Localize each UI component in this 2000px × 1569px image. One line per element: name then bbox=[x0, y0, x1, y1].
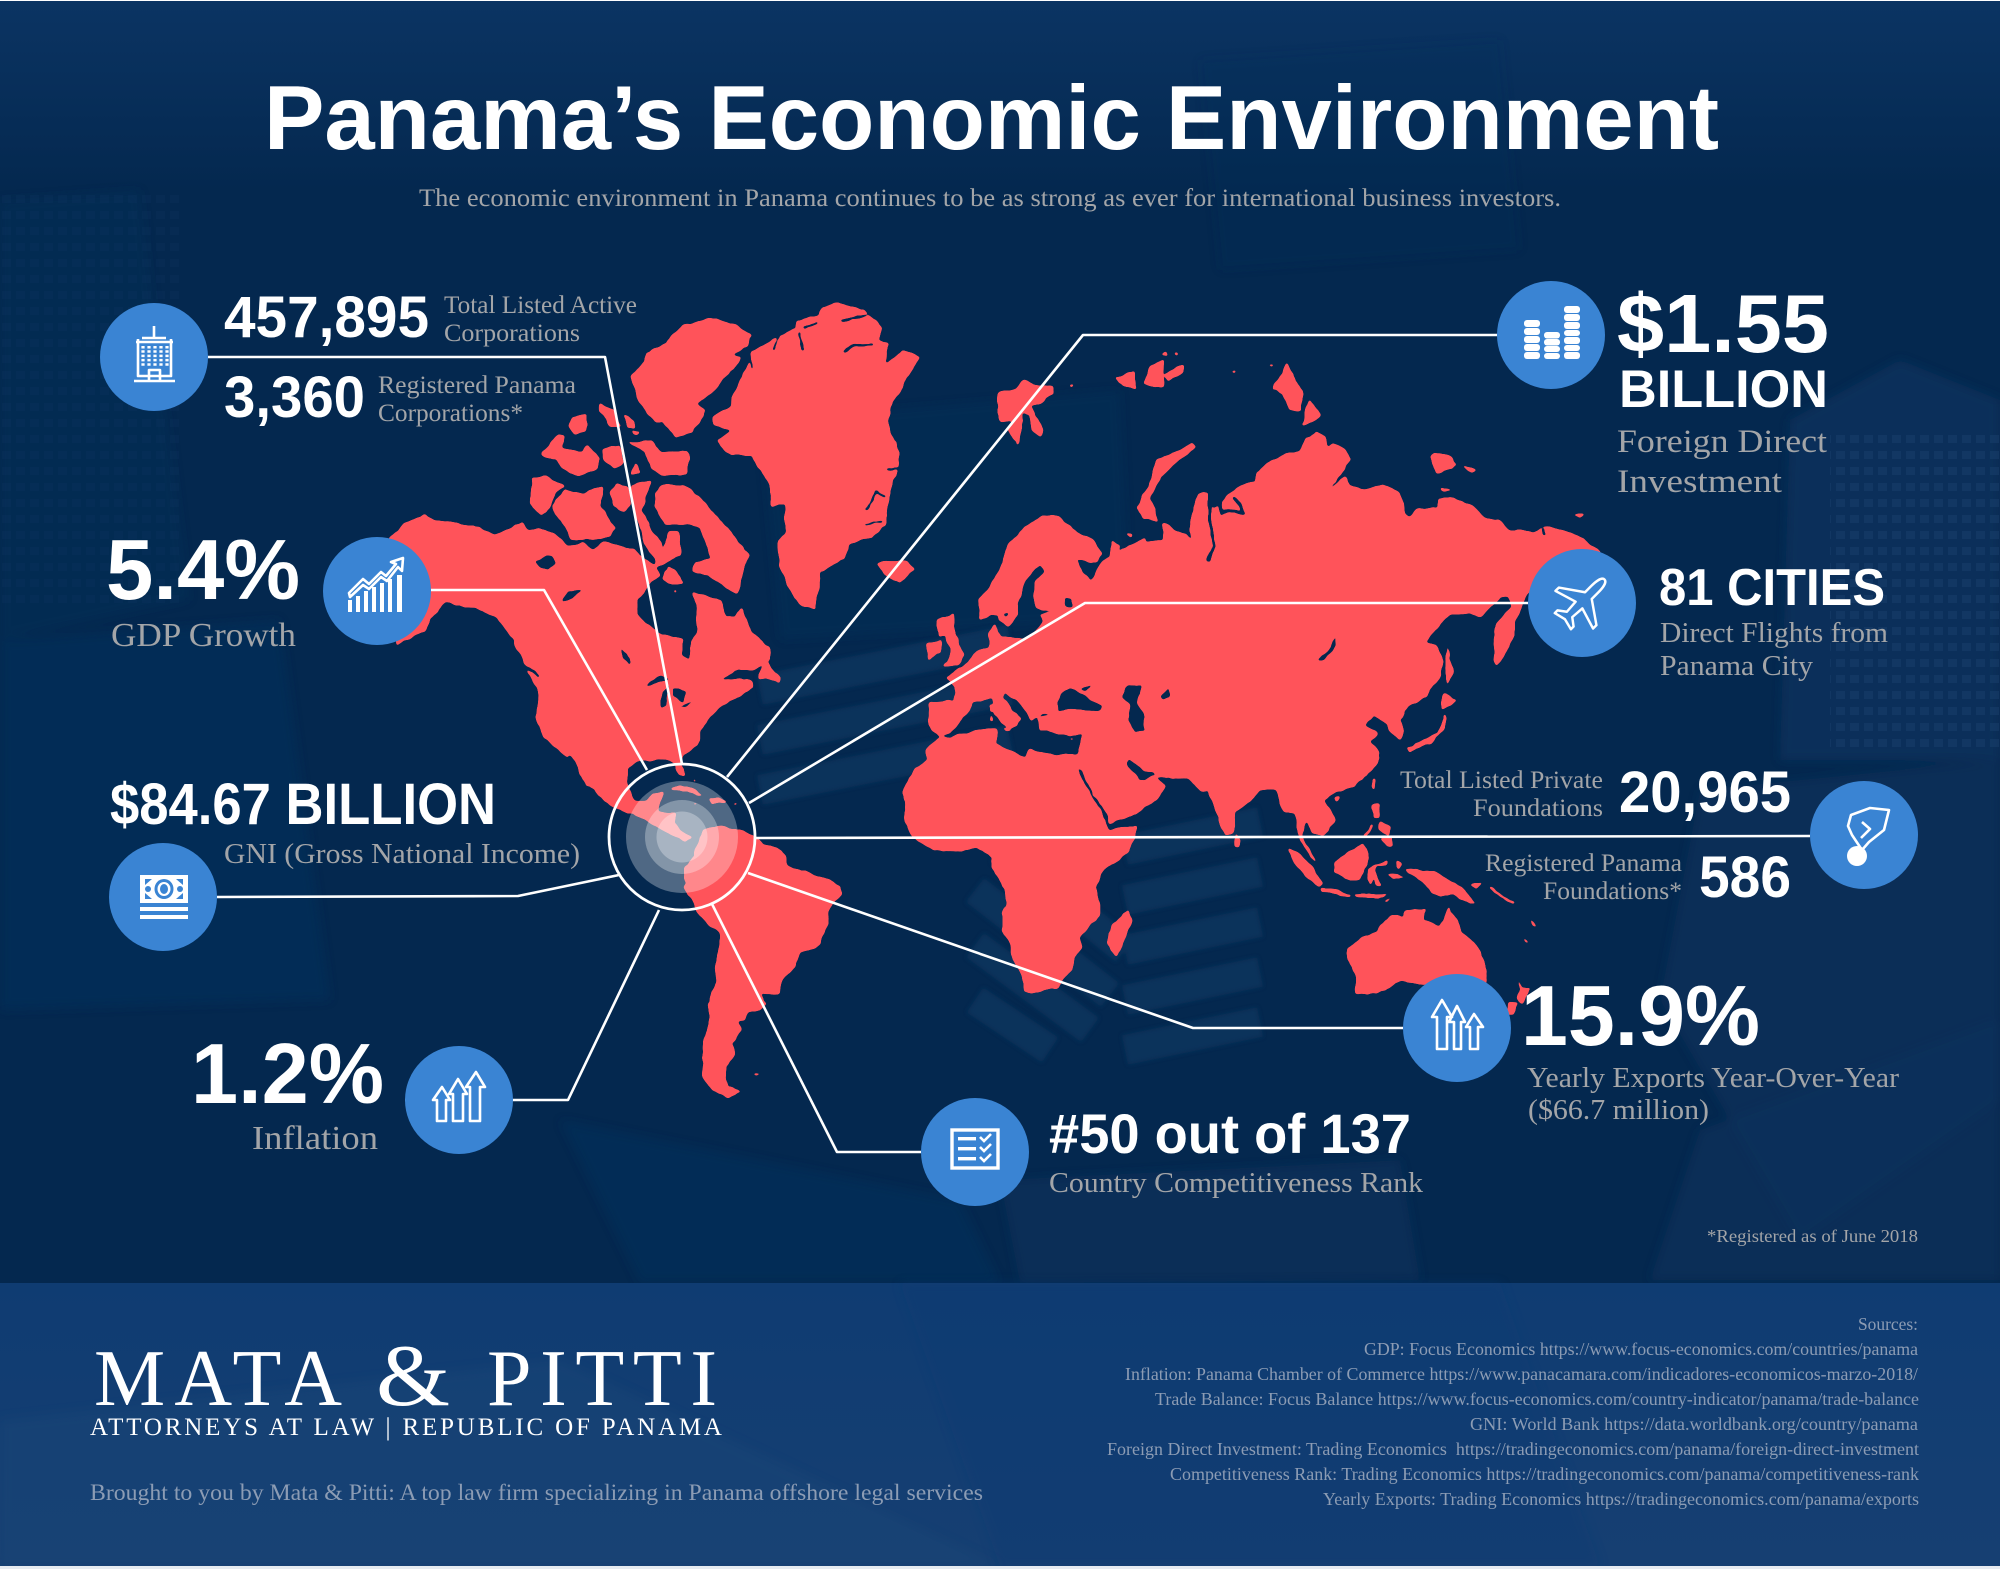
stat: private foundations: Foundations bbox=[1473, 795, 1603, 822]
stat: gross national income: $84.67 BILLION bbox=[110, 772, 496, 837]
stat: direct flights: Direct Flights from bbox=[1660, 617, 1888, 649]
stat: private foundations: Total Listed Private bbox=[1400, 767, 1603, 794]
stat: private foundations: 586 bbox=[1699, 845, 1791, 910]
sources list: Yearly Exports: Trading Economics https://tradingeconomics.com/panama/exports bbox=[1323, 1489, 1919, 1509]
sources list: GNI: World Bank https://data.worldbank.org/country/panama bbox=[1470, 1414, 1918, 1434]
stat: inflation bbox=[191, 1027, 513, 1157]
sources list: Sources: bbox=[1858, 1314, 1918, 1334]
stat: gross national income bbox=[109, 772, 580, 951]
stat: foreign direct investment: Investment bbox=[1617, 464, 1782, 500]
stat: gross national income: GNI (Gross National Income) bbox=[224, 839, 580, 870]
stat: foreign direct investment: $1.55 bbox=[1617, 277, 1829, 370]
stat: direct flights: 81 CITIES bbox=[1659, 559, 1885, 617]
stat: yearly exports: ($66.7 million) bbox=[1528, 1095, 1709, 1126]
sources list: Trade Balance: Focus Balance https://www.focus-economics.com/country-indicator/panama/trade-balance bbox=[1155, 1389, 1919, 1409]
map: North America and Arctic Canada bbox=[387, 318, 779, 813]
map: Arctic and European islands bbox=[927, 352, 1197, 667]
stat: foreign direct investment: Foreign Direct bbox=[1617, 424, 1827, 460]
stat: foreign direct investment: BILLION bbox=[1619, 360, 1828, 419]
map: South America bbox=[683, 826, 842, 1098]
stat: private foundations: Registered Panama bbox=[1485, 850, 1682, 877]
footer band bbox=[0, 1283, 2000, 1569]
subtitle: The economic environment in Panama continues to be as strong as ever for international business investors. bbox=[419, 185, 1561, 212]
sources list: GDP: Focus Economics https://www.focus-economics.com/countries/panama bbox=[1364, 1339, 1918, 1359]
sources list bbox=[1107, 1314, 1919, 1509]
stat: corporations: Corporations bbox=[444, 320, 580, 347]
footnote: *Registered as of June 2018 bbox=[1707, 1226, 1918, 1246]
stat: corporations: 3,360 bbox=[224, 365, 365, 430]
stat: corporations: 457,895 bbox=[224, 285, 429, 350]
stat: corporations: Corporations* bbox=[378, 400, 523, 427]
stat: competitiveness rank: Country Competitiveness Rank bbox=[1049, 1168, 1423, 1199]
stat: direct flights: Panama City bbox=[1660, 650, 1814, 682]
stat: corporations: Total Listed Active bbox=[444, 292, 637, 319]
title: Panama’s Economic Environment bbox=[264, 68, 1719, 169]
stat: corporations bbox=[100, 285, 637, 430]
stat: yearly exports bbox=[1403, 969, 1900, 1126]
stat: inflation: Inflation bbox=[252, 1120, 378, 1157]
logo: Mata & Pitti: ATTORNEYS AT LAW | REPUBLIC OF PANAMA bbox=[90, 1414, 722, 1441]
sources list: Foreign Direct Investment: Trading Economics https://tradingeconomics.com/panama/foreign-direct-investment bbox=[1107, 1439, 1919, 1459]
world map bbox=[387, 303, 1600, 1098]
map: Southeast Asia and Oceania bbox=[1235, 740, 1537, 1015]
map: Siberian islands and Japan bbox=[1230, 363, 1585, 750]
stat: GDP growth: 5.4% bbox=[106, 523, 300, 618]
connector lines bbox=[208, 335, 1810, 1152]
logo: Mata & Pitti: MATA bbox=[94, 1335, 342, 1423]
stat: private foundations: Foundations* bbox=[1543, 878, 1682, 905]
stat: private foundations: 20,965 bbox=[1619, 760, 1791, 825]
stat: private foundations bbox=[1400, 760, 1918, 910]
map: Central America and Caribbean bbox=[580, 760, 738, 842]
map: Greenland and Iceland bbox=[712, 303, 920, 609]
stat: GDP growth: GDP Growth bbox=[111, 617, 296, 654]
map: Mediterranean islands and Madagascar bbox=[990, 705, 1132, 957]
stat: yearly exports: Yearly Exports Year-Over-Year bbox=[1527, 1063, 1900, 1094]
logo: Mata & Pitti: PITTI bbox=[487, 1335, 717, 1423]
stat: corporations: Registered Panama bbox=[378, 372, 576, 399]
sources list: Competitiveness Rank: Trading Economics https://tradingeconomics.com/panama/competitiveness-rank bbox=[1170, 1464, 1919, 1484]
sources list: Inflation: Panama Chamber of Commerce https://www.panacamara.com/indicadores-economicos-marzo-2018/ bbox=[1125, 1364, 1918, 1384]
stat: inflation: 1.2% bbox=[191, 1027, 384, 1122]
map: Eurasia and Africa bbox=[902, 432, 1600, 993]
stat: foreign direct investment bbox=[1497, 277, 1829, 500]
stat: competitiveness rank bbox=[921, 1098, 1423, 1206]
stat: competitiveness rank: #50 out of 137 bbox=[1049, 1102, 1411, 1165]
stat: GDP growth bbox=[106, 523, 431, 654]
logo: Mata & Pitti bbox=[90, 1328, 722, 1441]
tagline: Brought to you by Mata & Pitti: A top law firm specializing in Panama offshore legal services bbox=[90, 1480, 983, 1505]
stat: yearly exports: 15.9% bbox=[1521, 969, 1760, 1064]
logo: Mata & Pitti: & bbox=[376, 1328, 450, 1425]
Panama locator target bbox=[609, 764, 755, 910]
stat: direct flights bbox=[1528, 549, 1888, 682]
